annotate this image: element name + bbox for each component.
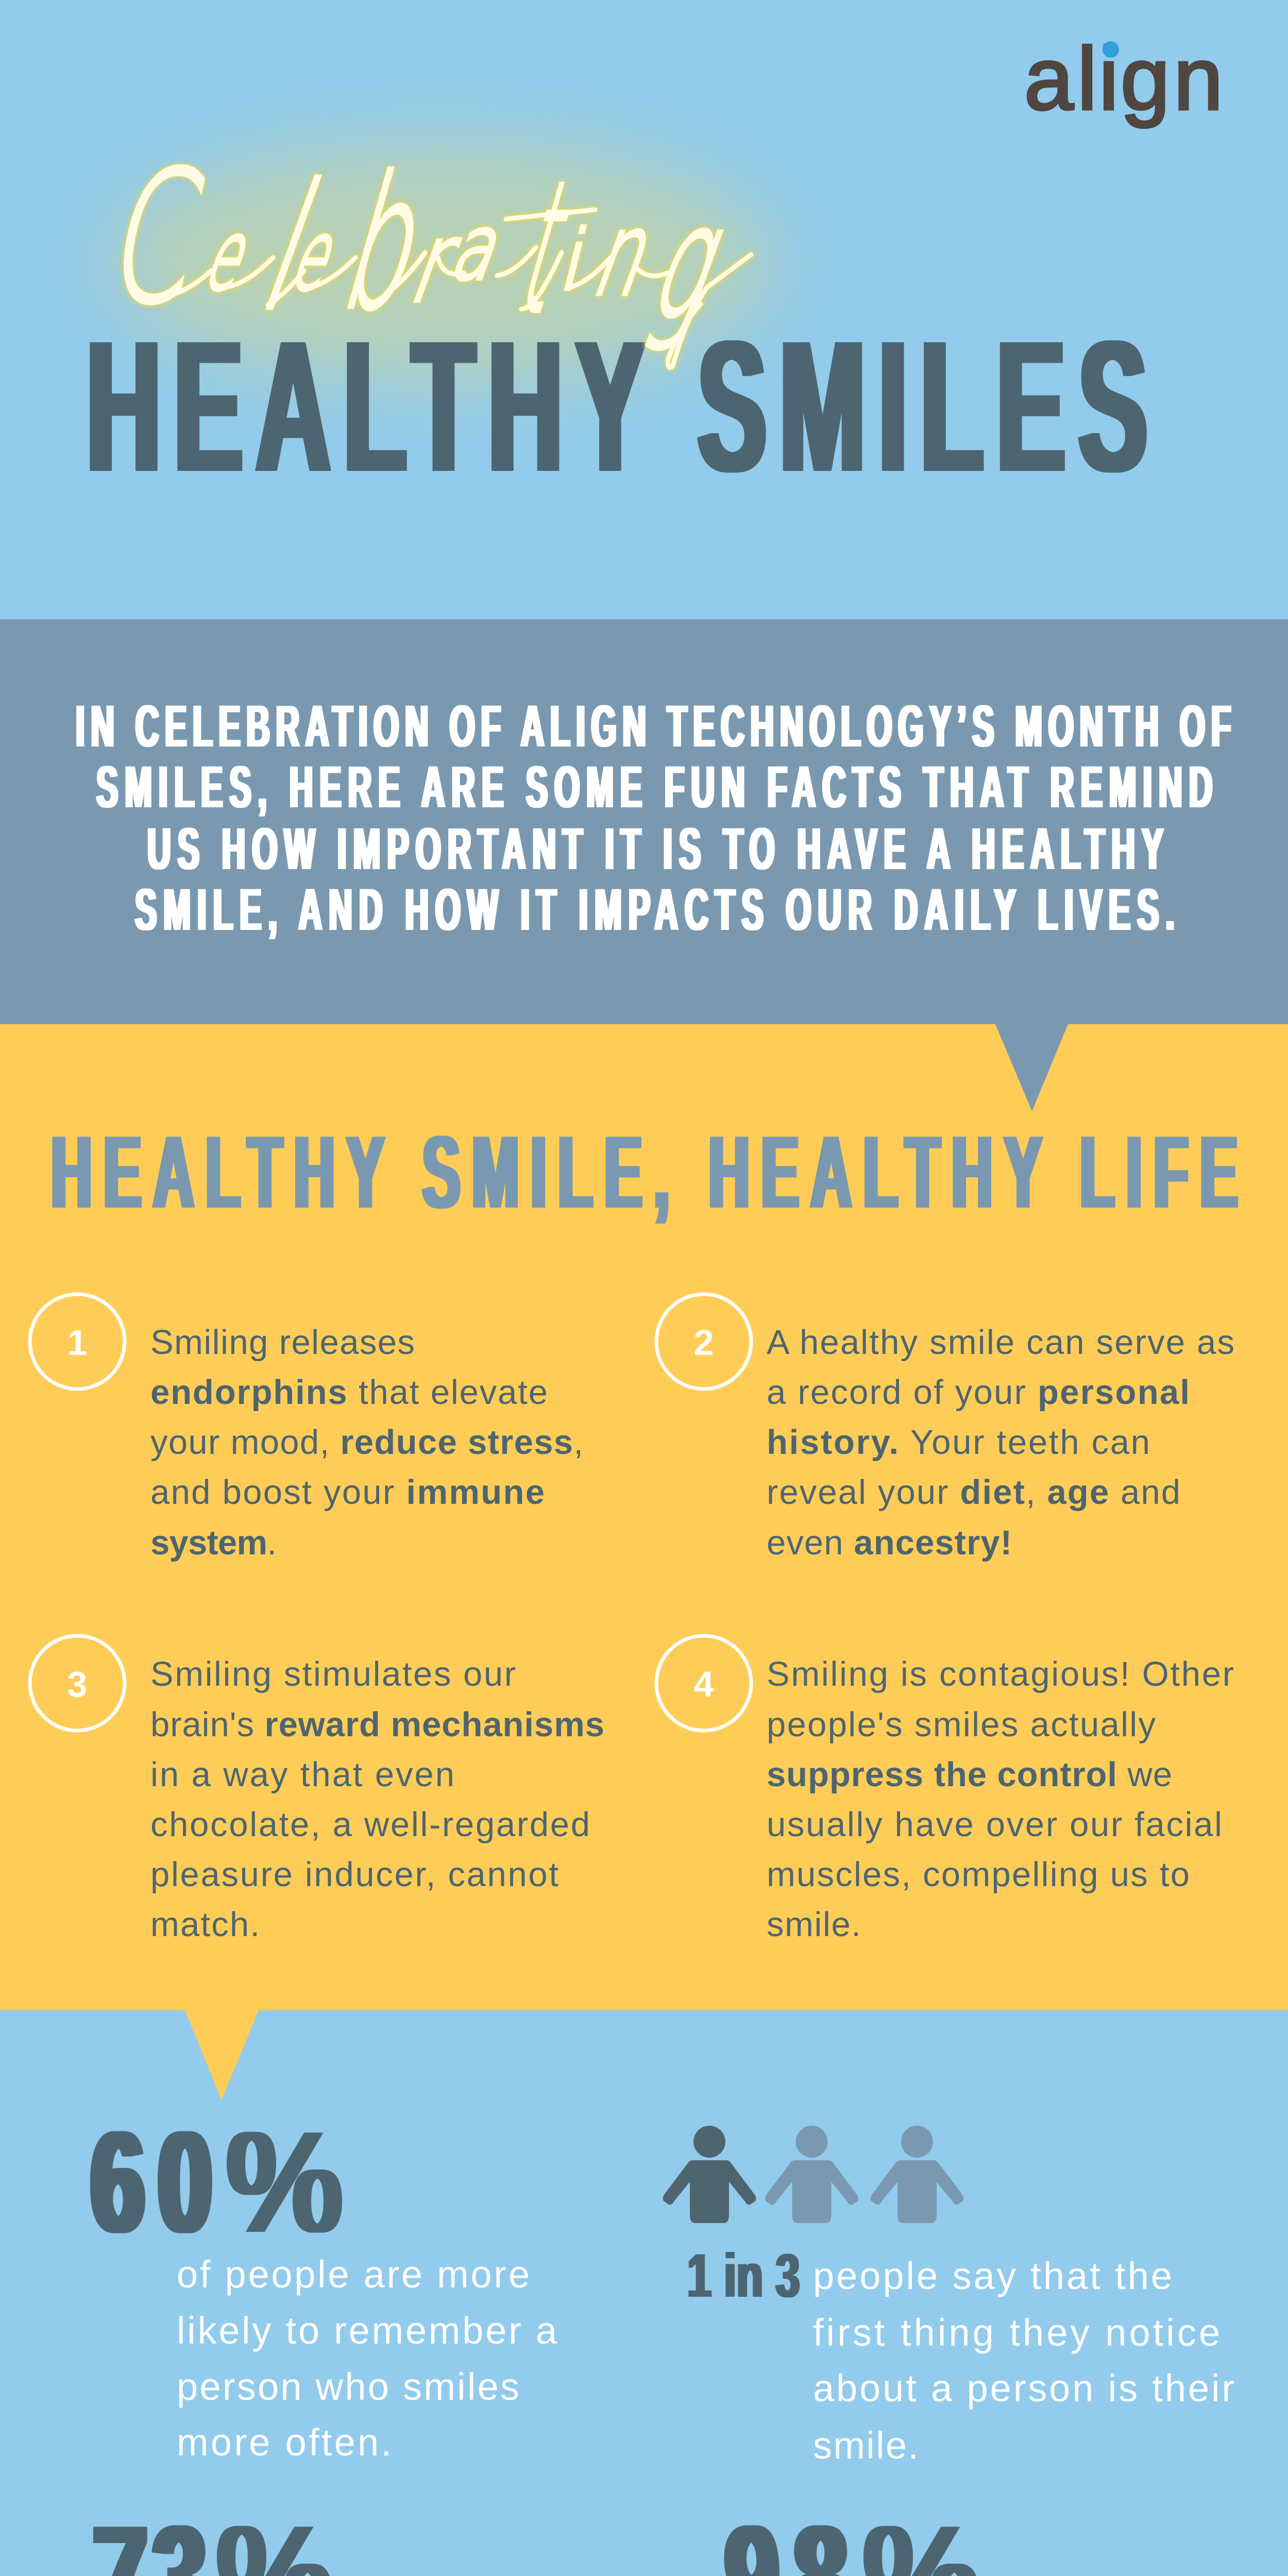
arrow: yellow panel pointer	[185, 2010, 259, 2100]
fact 4: Smiling is contagious! Other	[767, 1655, 1234, 1693]
panel: healthy smile healthy life	[0, 1024, 1288, 2010]
icon: number 4: 4	[694, 1664, 714, 1704]
stat: 60%: of people are more	[177, 2253, 530, 2296]
number: 98%	[725, 2496, 979, 2576]
script title: celebrating: C	[96, 133, 219, 343]
stat: 1 in 3: about a person is their	[813, 2367, 1234, 2410]
fact 4	[656, 1636, 1234, 1944]
fact 1: system.	[150, 1523, 277, 1562]
icon: three people	[663, 2126, 963, 2223]
arrow: intro band pointer	[995, 1024, 1068, 1111]
icon: number 2: 2	[694, 1323, 714, 1363]
fact 4: usually have over our facial	[767, 1805, 1222, 1844]
intro text: SMILE, AND HOW IT IMPACTS OUR DAILY LIVES.	[135, 876, 1175, 943]
script title: celebrating: g	[633, 173, 750, 353]
fact 1: your mood, reduce stress,	[150, 1423, 583, 1462]
script title: celebrating	[96, 133, 751, 367]
fact 1: endorphins that elevate	[150, 1373, 548, 1412]
icon: number 3	[30, 1636, 125, 1731]
title: healthy smiles: HEALTHY SMILES	[87, 302, 1147, 511]
stat: 98%	[725, 2496, 1204, 2576]
stat: 73%	[94, 2496, 597, 2576]
stat: 60%: more often.	[177, 2421, 392, 2464]
fact 3: chocolate, a well-regarded	[150, 1805, 590, 1844]
fact 3	[30, 1636, 604, 1944]
number: 73%	[94, 2496, 332, 2576]
fact 2: even ancestry!	[767, 1523, 1012, 1562]
stat: 1 in 3	[663, 2126, 1234, 2467]
stat: 1 in 3: people say that the	[813, 2255, 1172, 2297]
script title: celebrating: t	[503, 144, 591, 354]
script title: celebrating: a	[440, 197, 518, 299]
fact 3: brain's reward mechanisms	[150, 1705, 604, 1744]
title glow backdrop	[113, 144, 773, 381]
icon: highlighted person	[663, 2126, 756, 2223]
number: 1 in 3: 1 in 3	[687, 2241, 800, 2310]
intro text: IN CELEBRATION OF ALIGN TECHNOLOGY’S MONTH OF	[76, 693, 1231, 759]
fact 4: people's smiles actually	[767, 1705, 1156, 1744]
icon: number 4	[656, 1636, 751, 1731]
fact 4: smile.	[767, 1905, 861, 1944]
stat: 1 in 3: smile.	[813, 2424, 919, 2467]
script title: celebrating: e	[280, 201, 352, 311]
icon: number 1	[30, 1294, 125, 1389]
stat: 60%	[91, 2102, 557, 2464]
logo: align: align	[1024, 29, 1223, 128]
stat: 60%: person who smiles	[177, 2365, 519, 2408]
script title: celebrating: b	[325, 139, 449, 350]
section heading: HEALTHY SMILE, HEALTHY LIFE	[51, 1115, 1238, 1230]
script title: celebrating: n	[580, 189, 672, 320]
fact 4: suppress the control we	[767, 1755, 1172, 1794]
fact 3: Smiling stimulates our	[150, 1655, 516, 1693]
intro text: US HOW IMPORTANT IT IS TO HAVE A HEALTHY	[147, 816, 1163, 882]
icon: person	[765, 2126, 858, 2223]
fact 2: reveal your diet, age and	[767, 1473, 1180, 1512]
number: 60%: 60	[91, 2102, 211, 2263]
fact 2	[656, 1294, 1234, 1562]
script title: celebrating: e	[194, 201, 266, 311]
script title: celebrating: i	[554, 214, 596, 308]
script title: celebrating: l	[241, 148, 343, 349]
fact 1: Smiling releases	[150, 1323, 415, 1362]
fact 3: in a way that even	[150, 1755, 454, 1794]
icon: number 3: 3	[67, 1664, 87, 1704]
icon: number 1: 1	[67, 1323, 87, 1363]
fact 1	[30, 1294, 583, 1562]
icon: person	[871, 2126, 963, 2223]
number: 60%: %	[227, 2102, 342, 2263]
stat: 60%: likely to remember a	[177, 2309, 557, 2352]
number: 60%	[91, 2102, 342, 2263]
fact 3: pleasure inducer, cannot	[150, 1855, 558, 1894]
fact 3: match.	[150, 1905, 260, 1944]
intro text: SMILES, HERE ARE SOME FUN FACTS THAT REMIND	[96, 754, 1212, 820]
fact 1: and boost your immune	[150, 1473, 545, 1512]
fact 2: a record of your personal	[767, 1373, 1190, 1412]
intro text	[76, 693, 1231, 943]
panel: intro band	[0, 619, 1288, 1024]
flourish: connecting strokes and swashes	[139, 210, 751, 367]
stat: 1 in 3: first thing they notice	[813, 2311, 1220, 2354]
fact 2: history. Your teeth can	[767, 1423, 1150, 1462]
script title: celebrating: r	[397, 200, 476, 327]
icon: number 2	[656, 1294, 751, 1389]
fact 4: muscles, compelling us to	[767, 1855, 1190, 1894]
fact 2: A healthy smile can serve as	[767, 1323, 1234, 1362]
